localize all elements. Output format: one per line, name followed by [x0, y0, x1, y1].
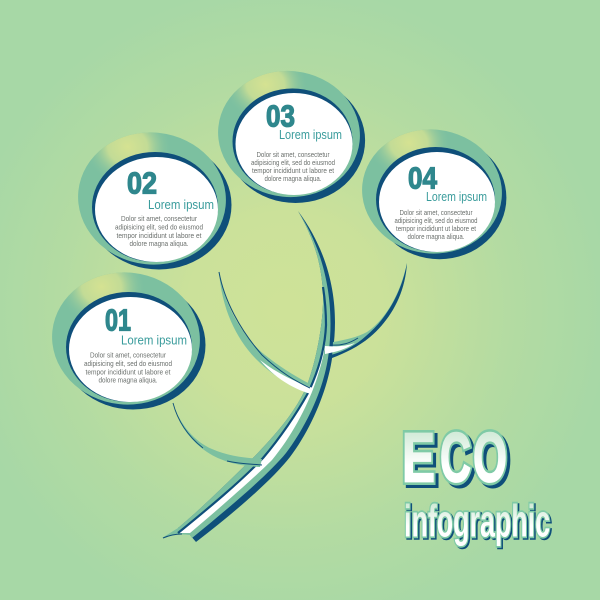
heading: Lorem ipsum: [148, 198, 214, 212]
panel: 01: [46, 265, 206, 412]
body text: tempor incididunt ut labore et: [116, 231, 202, 240]
body text: dolore magna aliqua.: [130, 239, 188, 248]
ring: [72, 125, 232, 272]
title: ECO: O: [476, 422, 510, 500]
panel: 02: [72, 125, 232, 272]
body text: dolore magna aliqua.: [98, 376, 158, 384]
number: 02: [127, 166, 157, 200]
heading: Lorem ipsum: [121, 334, 187, 348]
title: ECO: C: [440, 418, 471, 496]
body text: dolore magna aliqua.: [408, 232, 464, 241]
number: 01: [105, 302, 131, 338]
title: ECO: C: [440, 418, 471, 496]
ring: [46, 265, 206, 412]
ring: [356, 123, 508, 260]
branch: right: [325, 263, 407, 358]
body text: Dolor sit amet, consectetur: [400, 208, 473, 217]
title: ECO: E: [405, 422, 438, 500]
ring: [212, 64, 366, 204]
body text: tempor incididunt ut labore et: [86, 368, 170, 376]
title: ECO: C: [443, 422, 474, 500]
body text: Dolor sit amet, consectetur: [90, 350, 167, 360]
heading: Lorem ipsum: [426, 190, 487, 204]
body text: [84, 350, 172, 384]
body text: adipisicing elit, sed do eiusmod: [394, 216, 478, 225]
title: ECO: O: [473, 418, 507, 496]
tree: [162, 211, 407, 542]
body text: adipisicing elit, sed do eiusmod: [84, 359, 172, 368]
body text: adipisicing elit, sed do eiusmod: [251, 158, 335, 167]
body text: Dolor sit amet, consectetur: [256, 150, 330, 159]
title: ECO: O: [473, 418, 507, 496]
title: ECO: E: [402, 418, 435, 496]
body text: [115, 214, 203, 248]
branch: middle left: [219, 272, 313, 394]
body text: tempor incididunt ut labore et: [396, 224, 476, 233]
body text: adipisicing elit, sed do eiusmod: [115, 222, 203, 232]
heading: Lorem ipsum: [279, 128, 342, 142]
branch: lower left: [173, 403, 262, 467]
panel: 04: [356, 123, 508, 260]
number: 04: [408, 160, 438, 196]
body text: [394, 208, 478, 241]
main stem: [162, 211, 335, 542]
body text: dolore magna aliqua.: [264, 174, 322, 183]
title: ECO: E: [402, 418, 435, 496]
body text: Dolor sit amet, consectetur: [121, 214, 198, 223]
body text: [251, 150, 335, 183]
body text: tempor incididunt ut labore et: [252, 166, 334, 175]
title: ECO: [402, 418, 510, 500]
panel: 03: [212, 64, 366, 204]
number: 03: [266, 98, 295, 134]
